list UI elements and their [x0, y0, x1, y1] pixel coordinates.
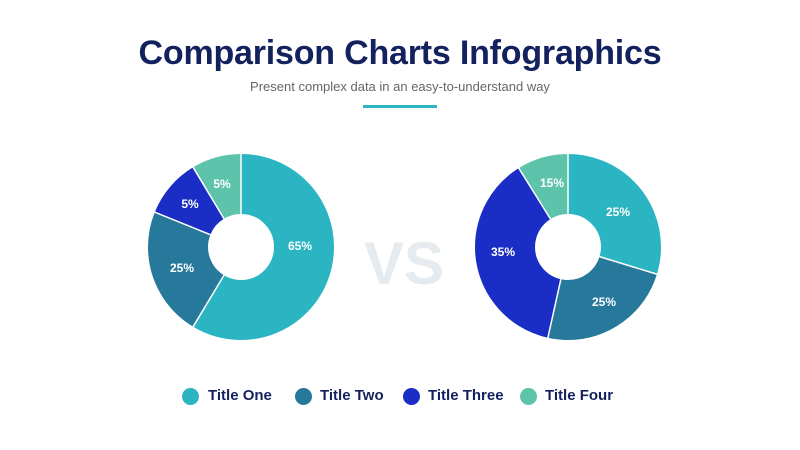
legend item: Title Two: Title Two	[320, 387, 384, 404]
donut: left: 5%	[181, 197, 199, 211]
donut: right	[491, 153, 658, 339]
VS text: VS	[364, 230, 444, 297]
donut: left	[154, 153, 312, 328]
legend	[182, 387, 613, 405]
donut: left: 5%	[213, 177, 231, 191]
legend item: Title Four: Title Four	[545, 387, 613, 404]
donut: right: 15%	[540, 176, 564, 190]
donut: right: 35%	[491, 245, 515, 259]
accent line	[363, 105, 437, 108]
donut: left: 65%	[288, 239, 312, 253]
donut: right: 25%	[606, 205, 630, 219]
legend item: Title Three: Title Three	[428, 387, 504, 404]
legend item: Title One: Title One	[208, 387, 272, 404]
legend item: Title One	[182, 387, 272, 405]
donut: left: 25%	[170, 261, 194, 275]
subtitle: Present complex data in an easy-to-understand way	[250, 79, 550, 94]
legend item: Title Four	[520, 387, 613, 405]
title: Comparison Charts Infographics	[139, 34, 661, 72]
legend item: Title Two	[295, 387, 384, 405]
donut: right: 25%	[592, 295, 616, 309]
